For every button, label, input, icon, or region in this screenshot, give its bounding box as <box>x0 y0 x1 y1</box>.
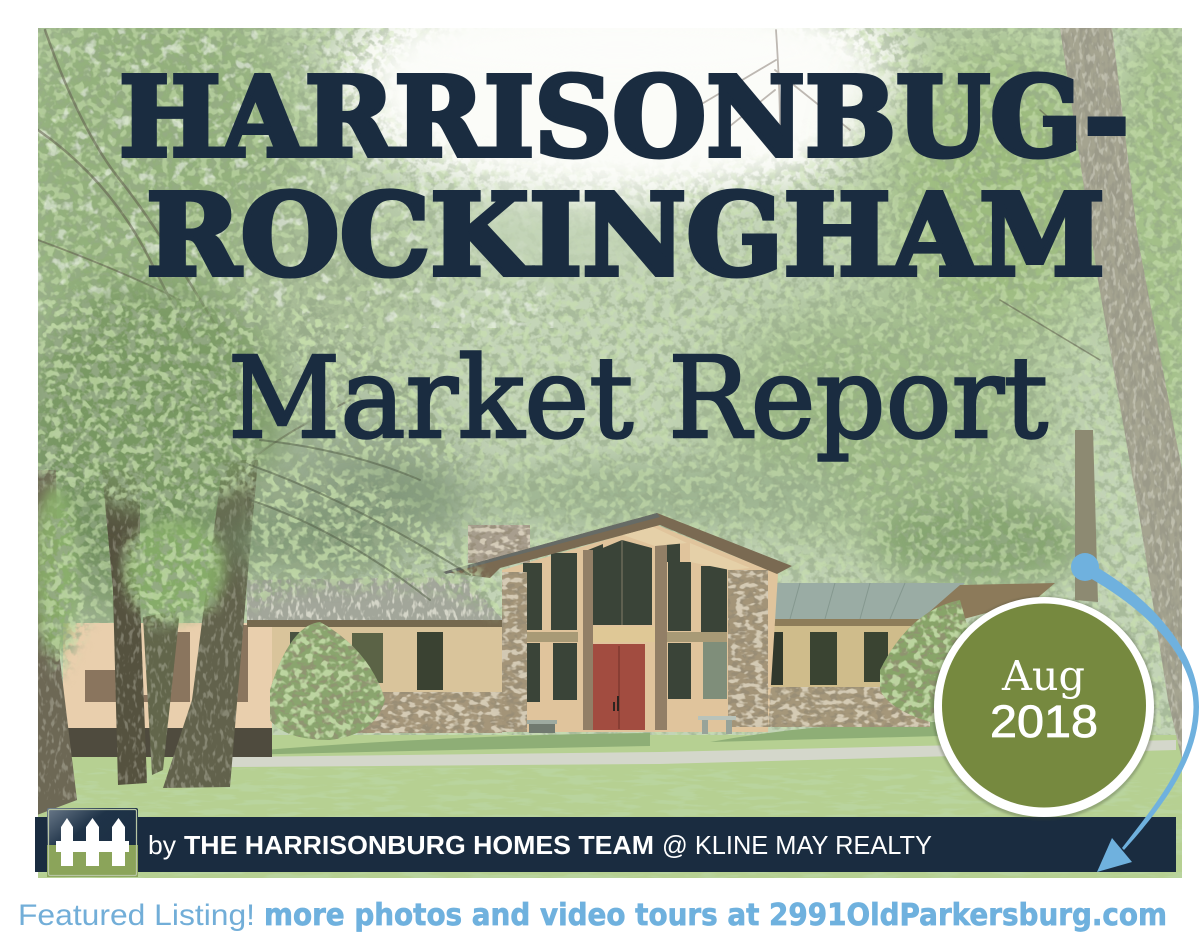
logo: white picket fence <box>47 808 138 877</box>
arrow from photo to listing link <box>1071 553 1199 872</box>
front door <box>593 644 645 730</box>
foreground boughs, leaves and shrubs <box>38 276 1199 846</box>
subtitle: Market Report <box>228 334 1048 464</box>
picket fence <box>56 818 129 866</box>
footer band <box>35 817 1176 872</box>
left wing <box>63 623 272 728</box>
badge month: Aug <box>1001 652 1085 700</box>
featured listing line: Featured Listing! <box>18 899 255 932</box>
central gable wall <box>502 525 778 732</box>
gable windows <box>523 540 727 702</box>
badge year: 2018 <box>990 696 1098 747</box>
title <box>119 52 1129 464</box>
house <box>63 513 1055 757</box>
main roof <box>443 513 792 578</box>
chimney <box>468 525 530 563</box>
benches <box>527 720 557 724</box>
stone columns and walls <box>502 570 768 732</box>
lawn and driveway <box>38 722 1182 880</box>
band credit text: @ KLINE MAY REALTY <box>662 830 932 860</box>
right wing <box>768 583 965 619</box>
tree trunks <box>37 28 1182 815</box>
title line 2: ROCKINGHAM <box>146 170 1105 302</box>
title line 1: HARRISONBUG- <box>119 52 1129 182</box>
band credit text <box>148 830 932 860</box>
band credit text: by <box>148 830 176 860</box>
band credit text: THE HARRISONBURG HOMES TEAM <box>184 830 654 860</box>
date badge <box>932 596 1156 820</box>
